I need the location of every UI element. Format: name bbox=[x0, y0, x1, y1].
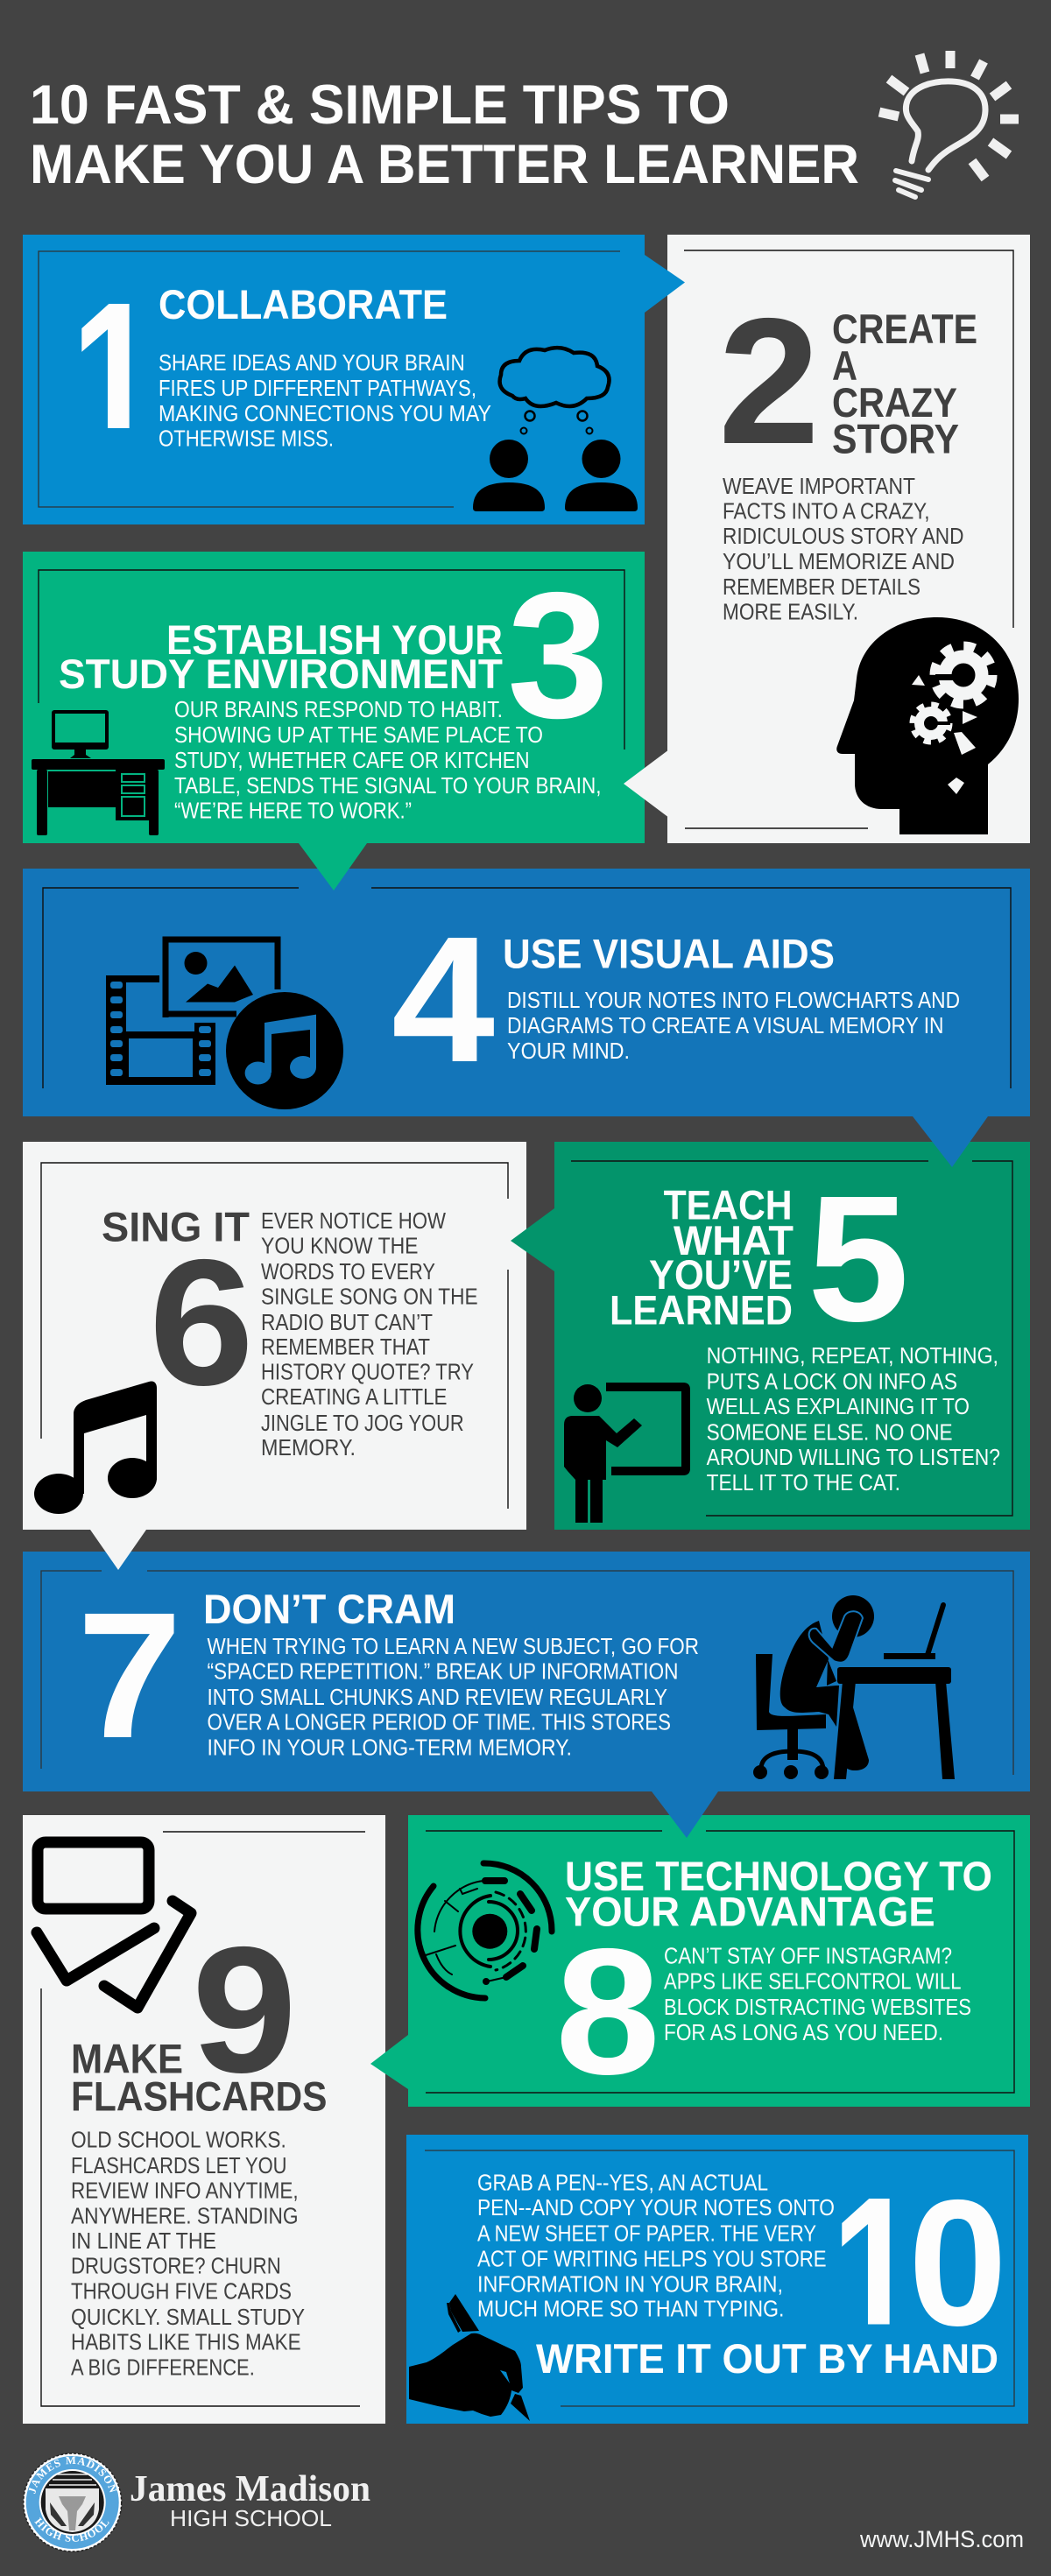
icon: desk with computer bbox=[32, 710, 165, 835]
logo: school name bbox=[130, 2469, 370, 2531]
website url: www.JMHS.com bbox=[859, 2526, 1024, 2552]
icon: teacher at board bbox=[564, 1383, 690, 1523]
body text 9: THROUGH FIVE CARDS bbox=[71, 2277, 292, 2304]
logo: school seal bbox=[23, 2453, 123, 2552]
body text 8: BLOCK DISTRACTING WEBSITES bbox=[664, 1994, 971, 2020]
body text 4 bbox=[507, 987, 960, 1064]
panel 8: use technology bbox=[370, 1815, 1030, 2112]
body text 5: AROUND WILLING TO LISTEN? bbox=[707, 1444, 1000, 1470]
body text 3: SHOWING UP AT THE SAME PLACE TO bbox=[174, 721, 543, 748]
body text 10: A NEW SHEET OF PAPER. THE VERY bbox=[477, 2221, 816, 2247]
body text 10: MUCH MORE SO THAN TYPING. bbox=[477, 2296, 784, 2322]
panel 3: establish your study environment bbox=[23, 552, 645, 890]
panel 6: sing it bbox=[23, 1142, 526, 1570]
body text 8: FOR AS LONG AS YOU NEED. bbox=[664, 2019, 943, 2045]
body text 5: PUTS A LOCK ON INFO AS bbox=[707, 1368, 957, 1394]
body text 1: FIRES UP DIFFERENT PATHWAYS, bbox=[159, 375, 476, 401]
title bbox=[30, 74, 859, 195]
icon: music note bbox=[34, 1381, 157, 1514]
icon: hand with pen bbox=[409, 2294, 530, 2421]
body text 9: A BIG DIFFERENCE. bbox=[71, 2354, 255, 2380]
body text 6: EVER NOTICE HOW bbox=[261, 1207, 446, 1234]
body text 2: RIDICULOUS STORY AND bbox=[723, 523, 963, 549]
body text 3: OUR BRAINS RESPOND TO HABIT. bbox=[174, 696, 503, 722]
heading 8: YOUR ADVANTAGE bbox=[565, 1889, 935, 1935]
number 4: 4 bbox=[391, 899, 495, 1100]
body text 4: DIAGRAMS TO CREATE A VISUAL MEMORY IN bbox=[507, 1012, 944, 1038]
body text 9: OLD SCHOOL WORKS. bbox=[71, 2126, 286, 2152]
body text 9: REVIEW INFO ANYTIME, bbox=[71, 2178, 299, 2204]
icon: head with gears bbox=[836, 617, 1019, 834]
body text 7: INTO SMALL CHUNKS AND REVIEW REGULARLY bbox=[207, 1684, 667, 1710]
body text 7: “SPACED REPETITION.” BREAK UP INFORMATION bbox=[207, 1658, 678, 1685]
body text 8: CAN’T STAY OFF INSTAGRAM? bbox=[664, 1943, 952, 1969]
logo: school seal: HIGH SCHOOL bbox=[34, 2516, 109, 2542]
body text 6: MEMORY. bbox=[261, 1434, 356, 1460]
body text 1: OTHERWISE MISS. bbox=[159, 426, 334, 452]
body text 6: HISTORY QUOTE? TRY bbox=[261, 1359, 474, 1385]
body text 8: APPS LIKE SELFCONTROL WILL bbox=[664, 1967, 962, 1994]
heading 9: MAKE bbox=[71, 2036, 183, 2082]
body text 9: IN LINE AT THE bbox=[71, 2228, 216, 2254]
body text 9: DRUGSTORE? CHURN bbox=[71, 2253, 281, 2279]
body text 3 bbox=[174, 696, 601, 823]
heading 5: WHAT bbox=[674, 1217, 794, 1263]
panel 7: don't cram bbox=[23, 1552, 1030, 1838]
number 9: 9 bbox=[192, 1910, 297, 2110]
number 6: 6 bbox=[149, 1222, 254, 1423]
body text 9: FLASHCARDS LET YOU bbox=[71, 2152, 287, 2178]
body text 2: WEAVE IMPORTANT bbox=[723, 473, 915, 499]
body text 5: SOMEONE ELSE. NO ONE bbox=[707, 1418, 953, 1445]
body text 3: STUDY, WHETHER CAFE OR KITCHEN bbox=[174, 747, 530, 773]
heading 3: ESTABLISH YOUR bbox=[166, 616, 503, 663]
heading 2: STORY bbox=[832, 415, 959, 462]
title: 10 FAST & SIMPLE TIPS TO bbox=[30, 74, 730, 136]
body text 2: YOU’LL MEMORIZE AND bbox=[723, 548, 955, 574]
body text 10: PEN--AND COPY YOUR NOTES ONTO bbox=[477, 2194, 835, 2221]
logo: school name: James Madison bbox=[130, 2469, 370, 2509]
body text 6: JINGLE TO JOG YOUR bbox=[261, 1410, 464, 1436]
icon: film, image and music bbox=[106, 940, 343, 1109]
heading 10: WRITE IT OUT BY HAND bbox=[536, 2335, 998, 2382]
heading 5: YOU’VE bbox=[649, 1251, 793, 1298]
panel 4: use visual aids bbox=[23, 869, 1030, 1167]
body text 3: TABLE, SENDS THE SIGNAL TO YOUR BRAIN, bbox=[174, 772, 601, 799]
body text 2: REMEMBER DETAILS bbox=[723, 574, 921, 600]
heading 2: CREATE bbox=[832, 306, 977, 352]
icon: two people thinking bbox=[473, 348, 638, 511]
title: MAKE YOU A BETTER LEARNER bbox=[30, 134, 859, 195]
body text 6: CREATING A LITTLE bbox=[261, 1383, 447, 1410]
body text 8 bbox=[664, 1943, 971, 2045]
heading 3 bbox=[59, 616, 503, 697]
logo: school seal: JAMES MADISON bbox=[28, 2457, 117, 2494]
body text 4: YOUR MIND. bbox=[507, 1038, 630, 1064]
body text 1 bbox=[159, 349, 491, 452]
body text 7: INFO IN YOUR LONG-TERM MEMORY. bbox=[207, 1734, 572, 1760]
body text 9 bbox=[71, 2126, 305, 2380]
body text 2: MORE EASILY. bbox=[723, 599, 858, 625]
icon: technology rings bbox=[418, 1863, 552, 1998]
body text 9: ANYWHERE. STANDING bbox=[71, 2203, 299, 2229]
body text 6: REMEMBER THAT bbox=[261, 1334, 430, 1360]
body text 9: HABITS LIKE THIS MAKE bbox=[71, 2329, 301, 2355]
heading 4: USE VISUAL AIDS bbox=[503, 931, 835, 977]
panel 5: teach what you've learned bbox=[511, 1142, 1030, 1530]
icon: stressed student at desk bbox=[753, 1595, 955, 1779]
icon: flashcards bbox=[37, 1842, 191, 2008]
body text 7: OVER A LONGER PERIOD OF TIME. THIS STORES bbox=[207, 1709, 671, 1735]
body text 5 bbox=[707, 1342, 1000, 1496]
number 10: 1 bbox=[831, 2151, 919, 2396]
heading 2 bbox=[832, 306, 977, 462]
heading 8 bbox=[565, 1853, 992, 1935]
number 7: 7 bbox=[77, 1575, 182, 1776]
heading 9: FLASHCARDS bbox=[71, 2073, 328, 2120]
icon: light bulb bbox=[879, 51, 1019, 197]
body text 5: WELL AS EXPLAINING IT TO bbox=[707, 1393, 970, 1419]
body text 10: INFORMATION IN YOUR BRAIN, bbox=[477, 2270, 783, 2297]
heading 5: TEACH bbox=[664, 1182, 793, 1228]
heading 2: CRAZY bbox=[832, 379, 957, 426]
body text 2 bbox=[723, 473, 963, 625]
body text 10: GRAB A PEN--YES, AN ACTUAL bbox=[477, 2170, 768, 2196]
body text 6: SINGLE SONG ON THE bbox=[261, 1284, 478, 1310]
body text 6 bbox=[261, 1207, 478, 1460]
body text 6: WORDS TO EVERY bbox=[261, 1258, 435, 1284]
heading 2: A bbox=[832, 342, 857, 389]
heading 5 bbox=[610, 1182, 794, 1333]
body text 10: ACT OF WRITING HELPS YOU STORE bbox=[477, 2246, 827, 2272]
body text 6: YOU KNOW THE bbox=[261, 1233, 419, 1259]
body text 3: “WE’RE HERE TO WORK.” bbox=[174, 797, 412, 823]
heading 8: USE TECHNOLOGY TO bbox=[565, 1853, 992, 1899]
body text 4: DISTILL YOUR NOTES INTO FLOWCHARTS AND bbox=[507, 987, 960, 1013]
number 10 bbox=[842, 2199, 1000, 2326]
body text 1: SHARE IDEAS AND YOUR BRAIN bbox=[159, 349, 465, 376]
panel 1: collaborate bbox=[23, 235, 685, 524]
number 3: 3 bbox=[507, 555, 609, 756]
heading 9 bbox=[71, 2036, 328, 2120]
number 8: 8 bbox=[555, 1911, 660, 2112]
number 2: 2 bbox=[718, 281, 820, 482]
body text 6: RADIO BUT CAN’T bbox=[261, 1309, 433, 1335]
panel 2: create a crazy story bbox=[624, 235, 1030, 843]
body text 5: TELL IT TO THE CAT. bbox=[707, 1469, 900, 1496]
panel 9: make flashcards bbox=[23, 1815, 385, 2424]
body text 2: FACTS INTO A CRAZY, bbox=[723, 497, 930, 524]
body text 1: MAKING CONNECTIONS YOU MAY bbox=[159, 400, 491, 426]
logo: school name: HIGH SCHOOL bbox=[170, 2505, 332, 2531]
heading 6: SING IT bbox=[102, 1203, 250, 1250]
number 10: 0 bbox=[908, 2163, 1007, 2363]
panel 10: write it out by hand bbox=[406, 2135, 1028, 2424]
body text 7: WHEN TRYING TO LEARN A NEW SUBJECT, GO FOR bbox=[207, 1633, 699, 1659]
number 1: 1 bbox=[71, 257, 159, 501]
body text 5: NOTHING, REPEAT, NOTHING, bbox=[707, 1342, 998, 1369]
heading 1: COLLABORATE bbox=[159, 281, 448, 327]
heading 5: LEARNED bbox=[610, 1287, 793, 1333]
body text 9: QUICKLY. SMALL STUDY bbox=[71, 2304, 305, 2330]
number 5: 5 bbox=[808, 1158, 909, 1359]
heading 7: DON’T CRAM bbox=[203, 1586, 455, 1632]
heading 3: STUDY ENVIRONMENT bbox=[59, 651, 503, 697]
body text 7 bbox=[207, 1633, 699, 1760]
body text 10 bbox=[477, 2170, 835, 2322]
